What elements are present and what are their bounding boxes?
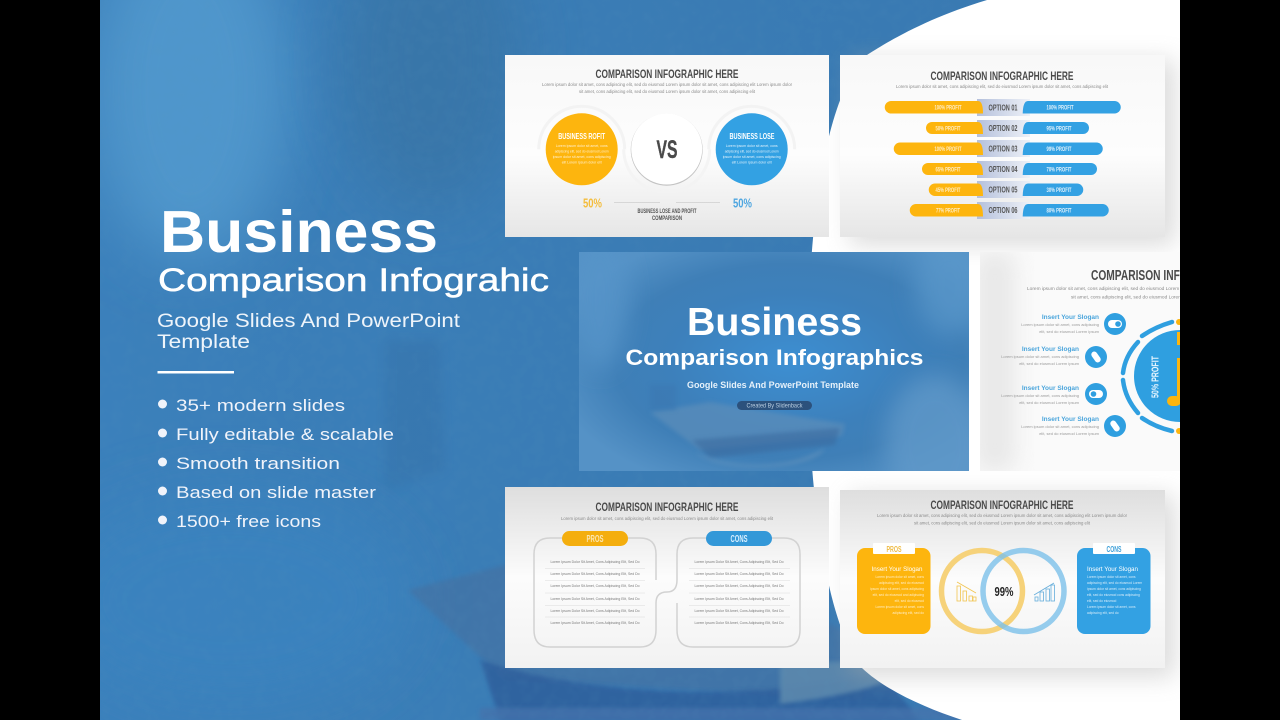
- slogan 1: Insert Your Slogan: [1042, 314, 1099, 321]
- connected outlines: [534, 538, 800, 647]
- slide 1 intro text: Lorem ipsum dolor sit amet, cons adipiscing elit, sed do eiusmod Lorem ipsum dolor sit amet, cons adipiscing elit Lorem ipsum dolor: [542, 82, 792, 87]
- pros list: Lorem Ipsum Dolor Sit Amet, Cons Adipiscing Elit, Sed Do: [550, 571, 640, 576]
- cover title: Business: [687, 301, 862, 344]
- slogan 1: Lorem ipsum dolor sit amet, cons adipiscing: [1021, 322, 1099, 327]
- blue circle: business lose: [716, 113, 788, 185]
- orange bars: [885, 101, 983, 216]
- icon: paperclip: [1104, 415, 1126, 437]
- slide 5 intro text: sit amet, cons adipiscing elit, sed do eiusmod Lorem ipsum dolor sit amet, cons adipiscing elit: [914, 520, 1091, 526]
- blue circle: business lose: Lorem ipsum dolor sit amet, cons: [726, 144, 778, 148]
- wheel label: 50% PROFIT: [1150, 356, 1162, 398]
- pros card: elit, sed do eiusmod and adipiscing: [873, 593, 924, 597]
- VS circle: [631, 114, 703, 186]
- slogan 4: Lorem ipsum dolor sit amet, cons adipiscing: [1021, 424, 1099, 429]
- tagline: Template: [157, 332, 250, 353]
- middle option blocks: [977, 99, 1030, 219]
- pros pill: [562, 531, 628, 546]
- orange circle: business profit: [546, 113, 618, 185]
- pros list: Lorem Ipsum Dolor Sit Amet, Cons Adipiscing Elit, Sed Do: [550, 608, 640, 613]
- cons card: Lorem ipsum dolor sit amet, cons: [1087, 575, 1136, 579]
- cons list: Lorem Ipsum Dolor Sit Amet, Cons Adipiscing Elit, Sed Do: [694, 583, 784, 588]
- orange bar labels: 50% PROFIT: [936, 126, 961, 132]
- wheel segments: [1123, 322, 1172, 431]
- orange bar labels: 65% PROFIT: [936, 168, 961, 174]
- cons card: Insert Your Slogan: [1087, 567, 1138, 573]
- slogan 2: elit, sed do eiusmod Lorem ipsum: [1019, 361, 1080, 366]
- slogan 2: [1001, 346, 1080, 366]
- slide 4 intro text: Lorem ipsum dolor sit amet, cons adipiscing elit, sed do eiusmod Lorem ipsum dolor sit amet, cons adipiscing elit: [561, 516, 774, 521]
- slide 2 intro text: Lorem ipsum dolor sit amet, cons adipiscing elit, sed do eiusmod Lorem ipsum dolor sit amet, cons adipiscing elit: [896, 84, 1109, 89]
- blue bar labels: 99% PROFIT: [1046, 147, 1072, 153]
- wheel: 50% profit half: [1134, 330, 1180, 422]
- slogan 2: Lorem ipsum dolor sit amet, cons adipiscing: [1001, 354, 1079, 359]
- orange bar labels: 100% PROFIT: [934, 147, 962, 153]
- blue bar labels: 80% PROFIT: [1046, 208, 1072, 214]
- option labels: OPTION 01: [988, 102, 1018, 112]
- bullet 4: Based on slide master: [176, 483, 376, 502]
- slogan 3: elit, sed do eiusmod Lorem ipsum: [1019, 400, 1080, 405]
- slide 5 intro text: [877, 513, 1127, 526]
- circle halos: [539, 106, 795, 192]
- cover subtitle: Comparison Infographics: [626, 345, 924, 370]
- orange bar labels: [934, 106, 962, 214]
- icon: paperclip: [1085, 346, 1107, 368]
- cons list: Lorem Ipsum Dolor Sit Amet, Cons Adipiscing Elit, Sed Do: [694, 571, 784, 576]
- slogan rows: [1001, 314, 1100, 436]
- cons pill: [706, 531, 772, 546]
- bullet 2: Fully editable & scalable: [176, 425, 394, 444]
- slide 2: option bars: [840, 55, 1165, 237]
- feature list: [158, 396, 394, 531]
- center slide: title cover: [579, 252, 969, 471]
- slogan 2: Insert Your Slogan: [1022, 346, 1079, 353]
- slogan 3: Lorem ipsum dolor sit amet, cons adipiscing: [1001, 393, 1079, 398]
- cons card: CONS: [1106, 545, 1122, 554]
- slogan 1: [1021, 314, 1100, 334]
- icon: toggle: [1104, 313, 1126, 335]
- created-by pill: [737, 401, 812, 410]
- blue bar labels: 30% PROFIT: [1046, 188, 1072, 194]
- cons card: Lorem ipsum dolor sit amet, cons: [1087, 605, 1136, 609]
- slogan 4: Insert Your Slogan: [1042, 416, 1099, 423]
- option labels: OPTION 06: [988, 205, 1018, 215]
- VS circle: VS: [656, 136, 678, 164]
- slogan 1: elit, sed do eiusmod Lorem ipsum: [1039, 329, 1100, 334]
- comparison caption: BUSINESS LOSE AND PROFIT: [638, 209, 697, 215]
- created-by pill: Created By Slidenback: [746, 404, 803, 410]
- pros pill: PROS: [586, 534, 604, 545]
- slide 1 heading: COMPARISON INFOGRAPHIC HERE: [596, 67, 738, 81]
- cons list: Lorem Ipsum Dolor Sit Amet, Cons Adipiscing Elit, Sed Do: [694, 608, 784, 613]
- icon: falling bar chart: [957, 582, 976, 601]
- orange bar labels: 100% PROFIT: [934, 106, 962, 112]
- orange bar labels: 77% PROFIT: [936, 208, 960, 214]
- pros list: Lorem Ipsum Dolor Sit Amet, Cons Adipiscing Elit, Sed Do: [550, 583, 640, 588]
- option labels: OPTION 04: [988, 164, 1018, 174]
- pros card: PROS: [886, 545, 902, 554]
- blue bar labels: 100% PROFIT: [1046, 106, 1074, 112]
- tagline: Google Slides And PowerPoint: [157, 311, 461, 332]
- slogan 4: [1021, 416, 1100, 436]
- slide 5 heading: COMPARISON INFOGRAPHIC HERE: [930, 498, 1074, 512]
- cons list: Lorem Ipsum Dolor Sit Amet, Cons Adipiscing Elit, Sed Do: [694, 596, 784, 601]
- pros card: Insert Your Slogan: [872, 567, 922, 573]
- right percent: 50%: [733, 196, 752, 210]
- slide 4 heading: COMPARISON INFOGRAPHIC HERE: [596, 500, 738, 514]
- blue bar labels: 95% PROFIT: [1046, 126, 1072, 132]
- blue circle: business lose: elit Lorem ipsum dolor elit: [732, 160, 772, 164]
- subheading: Comparison Infograhic: Comparison Infograhic: [158, 262, 549, 298]
- bullet 1: 35+ modern slides: [176, 396, 345, 415]
- pros card: adipiscing elit, sed do: [892, 611, 924, 615]
- shadows behind slides: [850, 60, 1175, 677]
- blue circle: business lose: adipiscing elit, sed do eiusmod Lorem: [725, 150, 779, 154]
- bullet 5: 1500+ free icons: [176, 512, 321, 531]
- slide 3 intro text: sit amet, cons adipiscing elit, sed do eiusmod Lorem ipsum: [1071, 294, 1196, 300]
- headline: Business: Business: [160, 199, 438, 265]
- bullet 3: Smooth transition: [176, 454, 340, 473]
- pros list: [550, 559, 640, 625]
- pros list: Lorem Ipsum Dolor Sit Amet, Cons Adipiscing Elit, Sed Do: [550, 620, 640, 625]
- comparison caption: COMPARISON: [652, 216, 682, 222]
- left percent: 50%: [583, 196, 602, 210]
- background: blue textured photo: [100, 0, 987, 720]
- slide 1 intro text: sit amet, cons adipiscing elit, sed do eiusmod Lorem ipsum dolor sit amet, cons adipiscing elit: [579, 89, 756, 94]
- tagline: [157, 311, 461, 353]
- cons list: Lorem Ipsum Dolor Sit Amet, Cons Adipiscing Elit, Sed Do: [694, 620, 784, 625]
- blue circle: business lose: BUSINESS LOSE: [730, 132, 775, 141]
- cons list: [694, 559, 784, 625]
- slide 3 intro text: [1027, 286, 1180, 300]
- option labels: OPTION 02: [988, 123, 1018, 133]
- pros list: Lorem Ipsum Dolor Sit Amet, Cons Adipiscing Elit, Sed Do: [550, 559, 640, 564]
- option labels: [988, 102, 1018, 215]
- background: white curved shape: [808, 0, 1180, 720]
- venn value: 99%: [994, 585, 1014, 599]
- cons card: adipiscing elit, sed do eiusmod Lorem: [1087, 581, 1142, 585]
- slide 1 intro text: [542, 82, 792, 94]
- orange circle: business profit: elit Lorem ipsum dolor elit: [562, 160, 602, 164]
- slide 3 intro text: Lorem ipsum dolor sit amet, cons adipiscing elit, sed do eiusmod Lorem ipsum: [1027, 286, 1193, 292]
- cons card: [1077, 543, 1150, 634]
- comparison caption: [638, 209, 697, 222]
- cover tagline: Google Slides And PowerPoint Template: [687, 380, 859, 390]
- pros card: Lorem ipsum dolor sit amet, cons: [875, 575, 924, 579]
- slide 2 heading: COMPARISON INFOGRAPHIC HERE: [930, 69, 1074, 83]
- slogan 3: [1001, 385, 1080, 405]
- cons list: Lorem Ipsum Dolor Sit Amet, Cons Adipiscing Elit, Sed Do: [694, 559, 784, 564]
- slogan 4: elit, sed do eiusmod Lorem ipsum: [1039, 431, 1100, 436]
- blue bar labels: 70% PROFIT: [1046, 168, 1072, 174]
- pros card: elit, sed do eiusmod: [895, 599, 924, 603]
- orange circle: business profit: adipiscing elit, sed do eiusmod Lorem: [555, 150, 609, 154]
- pros card: ipsum dolor sit amet, cons adipiscing: [870, 587, 924, 591]
- comparison arrow: [614, 202, 720, 204]
- orange circle: business profit: Lorem ipsum dolor sit amet, cons: [556, 144, 608, 148]
- orange bar labels: 45% PROFIT: [936, 188, 961, 194]
- slide 5 intro text: Lorem ipsum dolor sit amet, cons adipiscing elit, sed do eiusmod Lorem ipsum dolor sit amet, cons adipiscing elit Lorem ipsum dolor: [877, 513, 1127, 518]
- pros card: adipiscing elit, sed do eiusmod: [879, 581, 924, 585]
- venn circles: [942, 550, 1064, 632]
- icon: toggle: [1085, 383, 1107, 405]
- slide 1: VS comparison: [505, 55, 829, 237]
- cons card: ipsum dolor sit amet, cons adipiscing: [1087, 587, 1141, 591]
- slogan 3: Insert Your Slogan: [1022, 385, 1079, 392]
- cons card: elit, sed do eiusmod: [1087, 599, 1116, 603]
- option labels: OPTION 03: [988, 144, 1018, 154]
- pros list: Lorem Ipsum Dolor Sit Amet, Cons Adipiscing Elit, Sed Do: [550, 596, 640, 601]
- icon: rising bar chart: [1034, 583, 1054, 601]
- pros card: [857, 543, 930, 634]
- cons card: elit, sed do eiusmod cons adipiscing: [1087, 593, 1140, 597]
- orange circle: business profit: ipsum dolor sit amet, cons adipiscing: [553, 155, 611, 159]
- blue bar labels: [1046, 106, 1074, 214]
- blue circle: business lose: ipsum dolor sit amet, cons adipiscing: [723, 155, 781, 159]
- slide 3: cropped profit wheel: [980, 255, 1180, 471]
- pros card: Lorem ipsum dolor sit amet, cons: [875, 605, 924, 609]
- orange circle: business profit: BUSINESS ROFIT: [558, 132, 605, 141]
- blue bars: [1023, 101, 1121, 216]
- puzzle edge: [1167, 319, 1180, 434]
- slide 5: venn comparison: [840, 490, 1165, 668]
- cons pill: CONS: [730, 534, 748, 545]
- option labels: OPTION 05: [988, 184, 1018, 194]
- cons card: adipiscing elit, sed do: [1087, 611, 1119, 615]
- slide 4: pros and cons: [505, 487, 829, 668]
